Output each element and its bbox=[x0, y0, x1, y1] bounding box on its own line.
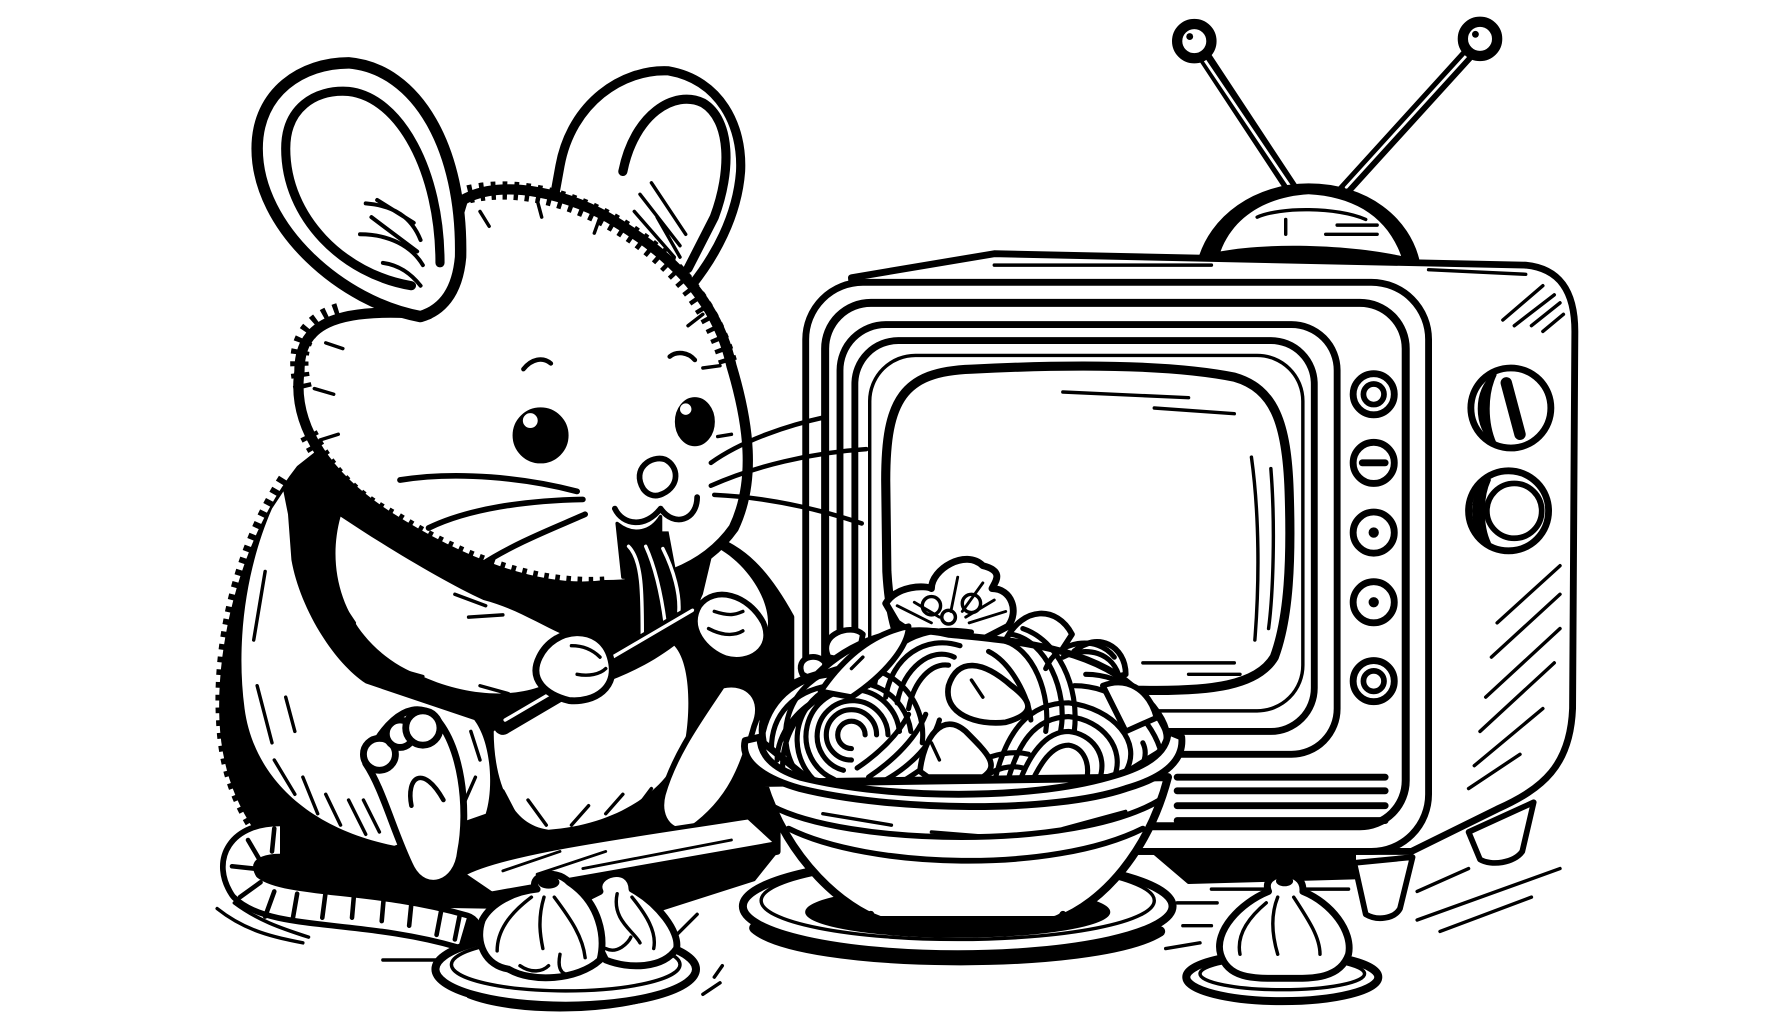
TV screen bbox=[886, 366, 1290, 690]
fur edge of head bbox=[299, 190, 729, 586]
mouse belly bbox=[494, 646, 688, 830]
TV dome bbox=[1200, 186, 1417, 263]
wooden board bbox=[463, 817, 777, 894]
mouse left ear bbox=[257, 63, 461, 317]
TV body side bbox=[851, 254, 1575, 851]
fur strokes on back bbox=[254, 571, 480, 834]
fur ticks inside head bbox=[314, 200, 731, 440]
floor sketch lines bbox=[217, 869, 1560, 994]
arm fur ticks bbox=[343, 594, 509, 694]
noodle swirl right bbox=[954, 643, 1168, 789]
TV control buttons bbox=[1353, 374, 1394, 702]
mouse right hand bbox=[695, 595, 766, 660]
TV side shading bbox=[994, 265, 1563, 789]
fur texture on back bbox=[223, 480, 286, 851]
background chunks and loops bbox=[801, 614, 1126, 686]
mouse eyes bbox=[513, 353, 714, 463]
toppings: vegetable chunks bbox=[821, 626, 1157, 777]
noodle swirl center bbox=[863, 629, 1075, 731]
belly fur edge bbox=[503, 766, 674, 825]
board lines bbox=[503, 840, 731, 874]
mouse head bbox=[298, 189, 748, 587]
mouse right foot bbox=[661, 685, 758, 831]
mouse tail bbox=[232, 829, 463, 939]
bowl bbox=[744, 731, 1182, 927]
dumpling back bbox=[577, 874, 677, 966]
TV legs bbox=[1354, 802, 1534, 918]
noodle plate bbox=[743, 858, 1173, 960]
TV vents bbox=[1177, 777, 1385, 821]
mouse body silhouette bbox=[223, 434, 791, 905]
noodle swirl left bbox=[763, 667, 949, 789]
mouse back and leg bbox=[241, 491, 490, 846]
right dumpling plate bbox=[1186, 953, 1378, 1001]
mouse left foot bbox=[363, 710, 464, 883]
mouse arm bbox=[335, 517, 562, 693]
mouse right arm bbox=[697, 546, 768, 656]
noodles in bowl bbox=[762, 559, 1168, 791]
topping: flower bbox=[886, 559, 1013, 657]
mouse right ear bbox=[549, 71, 741, 286]
dumpling front bbox=[480, 874, 602, 978]
left dumpling plate bbox=[435, 933, 696, 1010]
right dumpling bbox=[1219, 874, 1349, 978]
mouse nose and mouth bbox=[615, 459, 697, 577]
TV antennas bbox=[1177, 22, 1497, 192]
mouse left hand bbox=[536, 633, 612, 701]
mouse whiskers bbox=[400, 417, 866, 566]
noodles into mouth bbox=[617, 531, 686, 640]
board black shadow bbox=[503, 851, 777, 917]
TV knobs bbox=[1469, 368, 1551, 551]
TV front frame bbox=[806, 282, 1429, 851]
TV floor shadow bbox=[1143, 843, 1354, 882]
chopsticks bbox=[503, 610, 697, 726]
